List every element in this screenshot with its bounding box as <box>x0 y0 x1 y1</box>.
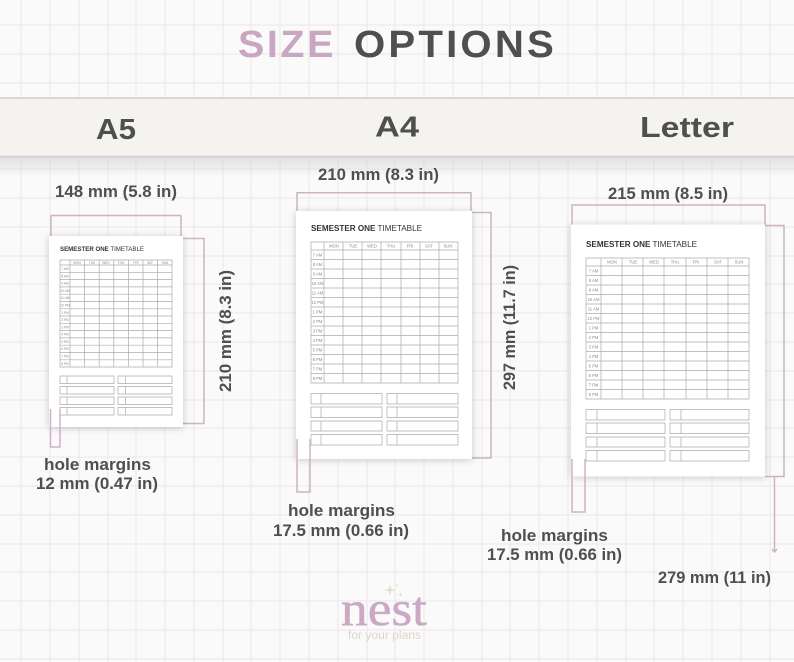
logo: nest for your plans: for your plans <box>348 630 421 642</box>
A4 weekly grid: 1 PM <box>313 310 323 314</box>
A4 width label: 210 mm (8.3 in) <box>318 166 439 184</box>
Letter height arrow <box>772 477 777 552</box>
Letter weekly grid: WED <box>649 260 659 264</box>
Letter weekly grid: SAT <box>714 260 722 264</box>
A4 width bracket <box>297 193 471 211</box>
A5 hole margin label <box>36 456 158 493</box>
Letter weekly grid: 2 PM <box>589 335 599 340</box>
A4 weekly grid: 7 AM <box>313 252 323 258</box>
Letter weekly grid: THU <box>671 260 679 264</box>
Letter note boxes <box>586 410 749 461</box>
Letter width bracket <box>572 205 765 225</box>
Letter weekly grid: 4 PM <box>589 354 599 359</box>
A5 weekly grid: 6 PM <box>61 347 69 351</box>
A5 weekly grid: 2 PM <box>61 318 69 322</box>
Letter weekly grid: 8 AM <box>589 278 599 283</box>
A4 hole margin label: 17.5 mm (0.66 in) <box>273 522 409 540</box>
A5 weekly grid: 5 PM <box>61 340 69 344</box>
panel: A5 size <box>36 183 235 493</box>
A5 weekly grid: 8 AM <box>61 274 69 278</box>
A5 weekly grid: 10 AM <box>60 289 70 293</box>
A5 weekly grid: MON <box>73 261 81 265</box>
A4 weekly grid: 11 AM <box>312 290 324 296</box>
A4 weekly grid: SUN <box>444 244 452 248</box>
A4 hole margin label <box>273 502 409 540</box>
A4 timetable page: SEMESTER ONE TIMETABLE <box>311 223 422 233</box>
A4 weekly grid <box>311 242 458 383</box>
title: SIZE <box>238 24 336 66</box>
Letter weekly grid: 10 AM <box>588 297 600 302</box>
A4 weekly grid: 6 PM <box>313 357 323 362</box>
A5 weekly grid: SUN <box>162 261 169 265</box>
A4 weekly grid: 12 PM <box>311 300 324 305</box>
A4 weekly grid: 3 PM <box>313 328 323 334</box>
A4 weekly grid: 8 PM <box>313 376 323 381</box>
A4 weekly grid: 2 PM <box>313 319 323 324</box>
A4 weekly grid: 7 PM <box>313 366 323 372</box>
panel: Letter size <box>487 185 784 587</box>
Letter weekly grid: 7 PM <box>589 382 599 388</box>
header band <box>0 98 794 177</box>
A4 hole margin label: hole margins <box>288 502 395 520</box>
A4 height label: 297 mm (11.7 in) <box>501 265 519 390</box>
A4 weekly grid: THU <box>387 244 395 248</box>
Letter weekly grid: TUE <box>629 260 637 264</box>
title: OPTIONS <box>354 24 557 66</box>
Letter hole margin label: 17.5 mm (0.66 in) <box>487 546 622 564</box>
A5 width label: 148 mm (5.8 in) <box>55 183 177 201</box>
Letter weekly grid: 9 AM <box>589 288 599 292</box>
Letter timetable page: SEMESTER ONE TIMETABLE <box>586 239 697 249</box>
A5 weekly grid: 12 PM <box>60 304 70 308</box>
Letter weekly grid: 12 PM <box>587 316 600 321</box>
A4 weekly grid: 5 PM <box>313 348 323 352</box>
Letter weekly grid: 6 PM <box>589 373 599 378</box>
Letter weekly grid: 7 AM <box>589 268 599 274</box>
Letter height bracket <box>765 226 784 476</box>
Letter hole margin label: hole margins <box>501 527 608 545</box>
A5 height label: 210 mm (8.3 in) <box>217 270 235 392</box>
heading: A5: A5 <box>96 114 136 146</box>
A5 weekly grid: 4 PM <box>61 333 69 337</box>
Letter weekly grid: SUN <box>735 260 743 264</box>
Letter hole margin bracket <box>572 459 585 512</box>
A4 weekly grid: FRI <box>407 244 413 248</box>
A4 note boxes <box>311 394 458 445</box>
title <box>238 24 557 66</box>
A4 weekly grid: 4 PM <box>313 338 323 343</box>
Letter timetable page <box>571 224 765 476</box>
A4 weekly grid: SAT <box>425 244 433 248</box>
A4 weekly grid: 10 AM <box>312 281 324 286</box>
Letter weekly grid: FRI <box>693 260 699 264</box>
A5 weekly grid: 3 PM <box>61 325 69 329</box>
A5 weekly grid: 1 PM <box>61 311 69 315</box>
Letter hole margin label <box>487 527 622 564</box>
A5 width bracket <box>51 216 181 236</box>
Letter height label: 279 mm (11 in) <box>658 569 771 587</box>
A5 weekly grid: FRI <box>133 261 139 265</box>
A5 weekly grid: WED <box>102 261 110 265</box>
A5 height bracket <box>183 238 204 424</box>
A5 weekly grid: 7 AM <box>61 267 69 271</box>
heading: Letter: Letter <box>640 112 734 144</box>
A5 weekly grid: 9 AM <box>61 282 69 286</box>
A5 timetable page <box>49 236 183 427</box>
A5 weekly grid: TUE <box>89 261 95 265</box>
A5 timetable page: SEMESTER ONE TIMETABLE <box>60 246 145 253</box>
Letter width label: 215 mm (8.5 in) <box>608 185 728 203</box>
Letter weekly grid <box>586 258 749 399</box>
A5 weekly grid: SAT <box>147 261 153 265</box>
Letter weekly grid: 11 AM <box>588 306 600 312</box>
A4 timetable page <box>296 211 472 459</box>
icon: sparkles <box>384 584 403 597</box>
A5 hole margin bracket <box>50 409 60 447</box>
Letter weekly grid: 5 PM <box>589 364 599 368</box>
A4 weekly grid: TUE <box>349 244 357 248</box>
A5 weekly grid: 7 PM <box>61 354 69 358</box>
panel: A4 size <box>273 166 519 540</box>
A4 height bracket <box>472 212 491 458</box>
A4 hole margin bracket <box>297 439 310 492</box>
Letter weekly grid: 3 PM <box>589 344 599 350</box>
Letter weekly grid: MON <box>607 260 617 264</box>
A5 note boxes <box>60 376 172 415</box>
A5 weekly grid <box>60 260 172 367</box>
A5 weekly grid: 11 AM <box>61 296 70 300</box>
A5 hole margin label: 12 mm (0.47 in) <box>36 475 158 493</box>
Letter weekly grid: 1 PM <box>589 326 599 330</box>
A5 weekly grid: THU <box>118 261 125 265</box>
Letter weekly grid: 8 PM <box>589 392 599 397</box>
A4 weekly grid: 9 AM <box>313 272 323 276</box>
A5 hole margin label: hole margins <box>44 456 151 474</box>
logo: nest for your plans: nest <box>341 581 427 636</box>
A5 weekly grid: 8 PM <box>61 362 69 366</box>
A4 weekly grid: 8 AM <box>313 262 323 267</box>
heading: A4: A4 <box>375 112 419 144</box>
A4 weekly grid: WED <box>367 244 377 248</box>
A4 weekly grid: MON <box>329 244 339 248</box>
